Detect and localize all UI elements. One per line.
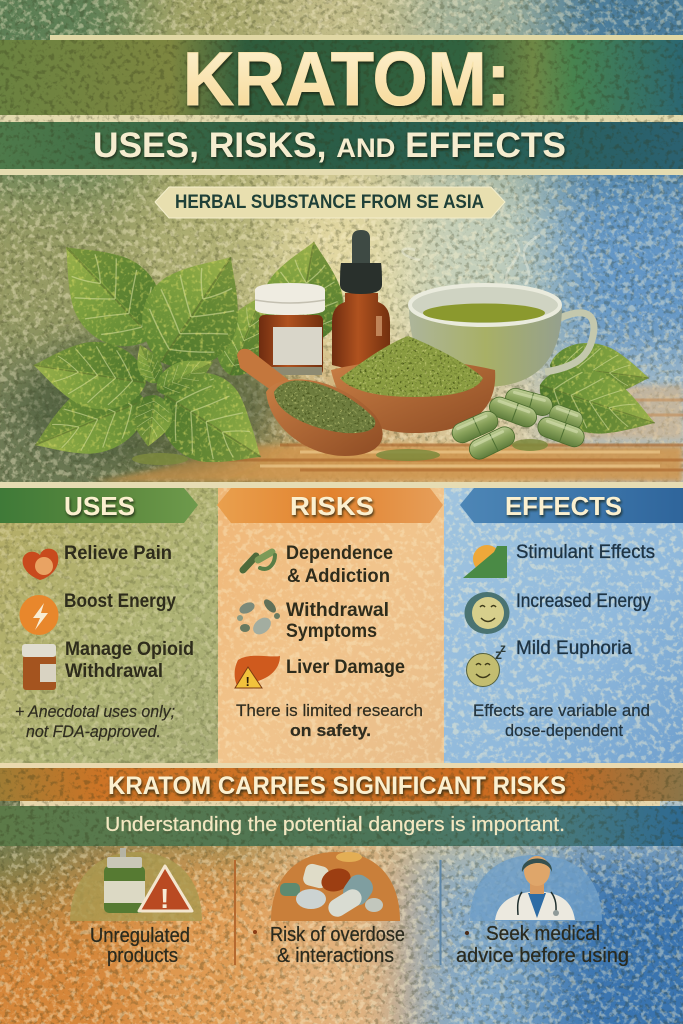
icon: bottle and warning: !: [160, 883, 169, 914]
text: stimulant effects: Stimulant Effects: [516, 542, 655, 563]
panel: overdose risk: [253, 852, 405, 967]
capsules: [449, 386, 587, 463]
warning banner: [0, 763, 683, 846]
uses header: USES: [64, 491, 135, 521]
text: seek medical advice: [456, 923, 629, 967]
hero illustration: [20, 219, 683, 490]
text: unregulated products: products: [107, 945, 178, 967]
text: seek medical advice: advice before using: [456, 945, 629, 967]
icon: liver warning: [235, 656, 280, 689]
text: risk of overdose: Risk of overdose: [270, 924, 405, 946]
wooden bowl with powder: [331, 336, 495, 433]
icon: pill jar: [22, 644, 56, 690]
text: relieve pain: Relieve Pain: [64, 543, 172, 564]
icon: pills pile: [271, 852, 400, 921]
scattered powder: [132, 439, 548, 465]
tagline ribbon: HERBAL SUBSTANCE FROM SE ASIA: [175, 192, 484, 213]
tagline ribbon: [155, 187, 505, 218]
text: seek medical advice: Seek medical: [486, 923, 600, 945]
uses header: [0, 488, 198, 523]
steam: [402, 235, 540, 290]
leaf shadow: [20, 330, 280, 470]
title: KRATOM: KRATOM:: [183, 37, 510, 122]
text: increased energy: Increased Energy: [516, 591, 651, 612]
scoop with dried leaf: [237, 349, 383, 456]
icon: energy bolt: [20, 595, 58, 635]
note: variable effects: [473, 701, 650, 740]
icon: chain links: [243, 552, 275, 570]
panel: unregulated products: [70, 848, 202, 967]
text: liver damage: Liver Damage: [286, 657, 405, 678]
note: anecdotal: [15, 702, 175, 741]
icon: heart: [23, 549, 58, 580]
icon: mild euphoria face: [466, 641, 506, 686]
text: withdrawal symptoms: Withdrawal: [286, 600, 389, 621]
text: dependence and addiction: & Addiction: [287, 566, 390, 587]
text: manage opioid withdrawal: Manage Opioid: [65, 639, 194, 660]
text: withdrawal symptoms: [286, 600, 389, 642]
risks header: RISKS: [290, 491, 374, 521]
text: dependence and addiction: Dependence: [286, 543, 393, 564]
note: limited research: [236, 701, 423, 740]
icon: doctor: [470, 855, 602, 921]
note: variable effects: dose-dependent: [505, 721, 623, 740]
text: unregulated products: [90, 925, 190, 967]
note: anecdotal: not FDA-approved.: [26, 722, 161, 741]
bullet: [253, 930, 257, 934]
note: limited research: There is limited research: [236, 701, 423, 720]
note: limited research: on safety.: [290, 721, 371, 740]
icon: liver warning: !: [246, 674, 250, 689]
bullet: [465, 931, 469, 935]
risks header: [217, 488, 443, 523]
subtitle: USES, RISKS, AND EFFECTS: [93, 126, 566, 165]
text: risk of overdose: & interactions: [277, 945, 394, 967]
panel: uses: [0, 488, 218, 764]
text: risk of overdose: [270, 924, 405, 967]
effects header: [460, 488, 683, 523]
icon: smile badge: [464, 592, 510, 634]
jar with white lid: [255, 283, 325, 375]
text: dependence and addiction: [286, 543, 393, 587]
panel: medical advice: [456, 855, 629, 967]
text: unregulated products: Unregulated: [90, 925, 190, 947]
banner subtext: Understanding the potential dangers is important.: [105, 814, 565, 836]
icon: mild euphoria face: z: [495, 646, 502, 662]
note: anecdotal: + Anecdotal uses only;: [15, 702, 175, 721]
title banner: [0, 35, 683, 175]
text: boost energy: Boost Energy: [64, 591, 176, 612]
panel: effects: [444, 488, 683, 764]
icon: mild euphoria face: z: [500, 641, 506, 655]
text: manage opioid withdrawal: [65, 639, 194, 682]
banner heading: KRATOM CARRIES SIGNIFICANT RISKS: [108, 772, 566, 800]
text: mild euphoria: Mild Euphoria: [516, 638, 632, 659]
text: withdrawal symptoms: Symptoms: [286, 621, 377, 642]
panel: risks: [217, 488, 444, 764]
note: variable effects: Effects are variable and: [473, 701, 650, 720]
effects header: EFFECTS: [505, 491, 622, 521]
text: manage opioid withdrawal: Withdrawal: [65, 661, 163, 682]
kratom leaves: [23, 219, 665, 490]
icon: withdrawal symptoms: [237, 597, 280, 638]
wooden table: [90, 385, 683, 482]
tea cup: [409, 285, 594, 387]
divider rail above columns: [0, 482, 683, 488]
dropper bottle: [332, 230, 390, 372]
icon: stimulant chart: [463, 545, 507, 578]
